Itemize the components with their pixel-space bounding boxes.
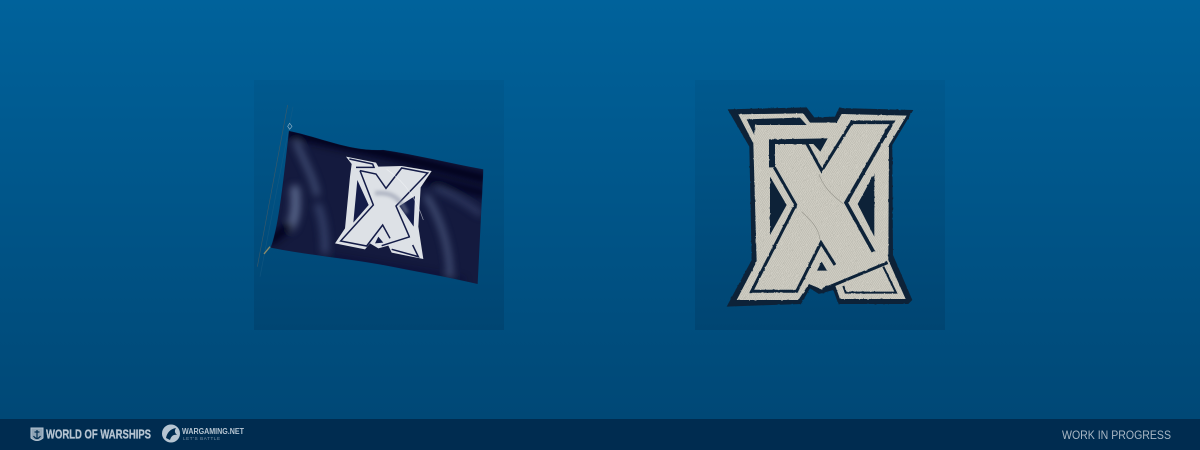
logo: World of Warships	[31, 426, 151, 442]
emblem holes	[353, 180, 415, 243]
flag cloth	[270, 131, 484, 284]
stitching seams	[802, 174, 843, 239]
emblem shading	[375, 193, 407, 213]
patch dark fills	[747, 118, 874, 271]
wordmark: WORLD OF WARSHIPS	[46, 426, 151, 442]
patch dark lines	[752, 121, 896, 293]
panel: patch	[695, 80, 945, 330]
footer bar	[0, 419, 1200, 450]
icon: embroidered X patch	[727, 107, 913, 307]
wordmark: WARGAMING.NET	[182, 427, 244, 436]
emblem white base	[335, 157, 432, 259]
patch dark border	[727, 107, 913, 307]
patch cream base	[737, 113, 907, 300]
tagline: LET'S BATTLE	[183, 436, 220, 441]
icon: wargaming circle	[162, 424, 180, 442]
emblem dark lines	[341, 159, 428, 257]
icon: flag	[257, 105, 490, 290]
work in progress label: WORK IN PROGRESS	[1062, 428, 1171, 442]
logo: Wargaming.net	[162, 424, 244, 442]
icon: anchor shield	[31, 428, 43, 440]
flag emblem X	[335, 157, 432, 259]
panel: flag	[254, 80, 504, 330]
flagpole	[257, 105, 293, 277]
